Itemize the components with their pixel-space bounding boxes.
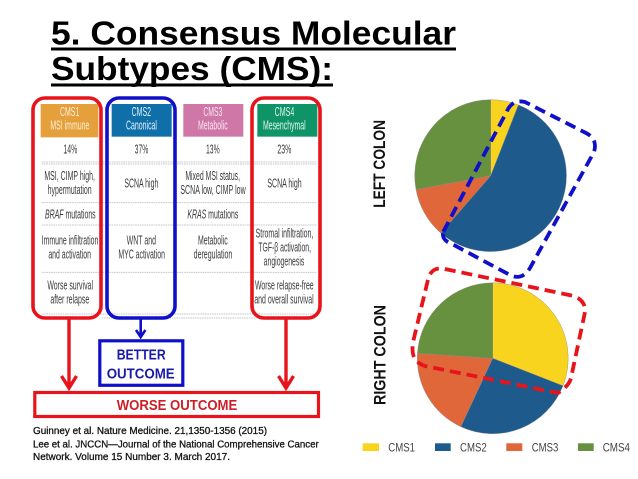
highlight box: CMS1 — [33, 98, 101, 318]
title: 5. Consensus Molecular — [51, 16, 456, 52]
references: Guinney et al. Nature Medicine. 21,1350-1356 (2015) — [33, 425, 267, 437]
genomic row: SCNA high — [267, 176, 302, 190]
pathway row — [42, 227, 313, 269]
header: CMS2 — [112, 104, 172, 137]
pathway row: TGF-β activation, — [258, 241, 311, 255]
survival row: Worse relapse-free — [255, 278, 314, 292]
header: CMS3: Metabolic — [198, 118, 228, 132]
genomic row: MSI, CIMP high, — [44, 169, 95, 183]
pathway row: Stromal infiltration, — [256, 227, 313, 241]
legend: CMS4 — [603, 443, 631, 455]
survival row: after relapse — [50, 292, 89, 306]
pie chart: left colon — [415, 100, 566, 252]
dashed outline: right colon CMS1 and CMS4 — [412, 268, 585, 393]
arrow: CMS2 to better outcome — [136, 319, 145, 337]
legend: CMS2 — [460, 443, 487, 455]
header: CMS3 — [183, 104, 243, 137]
pathway row: WNT and — [127, 234, 156, 248]
genomic row — [44, 169, 302, 197]
header: CMS1 — [41, 104, 98, 137]
label: right colon: RIGHT COLON — [372, 305, 390, 405]
arrow: CMS4 to worse outcome — [278, 319, 294, 388]
worse outcome box: WORSE OUTCOME — [117, 398, 238, 414]
highlight box: CMS2 — [107, 98, 175, 318]
header: CMS2: Canonical — [126, 118, 157, 132]
references: Network. Volume 15 Number 3. March 2017. — [33, 451, 230, 463]
percent row: 13% — [206, 142, 220, 156]
genomic row: hypermutation — [48, 183, 92, 197]
title — [51, 16, 456, 88]
percent row: 14% — [63, 142, 77, 156]
legend: CMS3 — [532, 443, 558, 455]
highlight box: CMS4 — [252, 98, 320, 318]
genomic row: SCNA high — [124, 176, 158, 190]
header: CMS3: CMS3 — [203, 105, 222, 119]
better outcome box: BETTER — [117, 347, 166, 363]
header: CMS4: Mesenchymal — [263, 118, 306, 132]
mutation row: KRAS mutations — [187, 208, 238, 222]
pathway row: and activation — [48, 248, 91, 262]
better outcome box: OUTCOME — [107, 366, 175, 382]
title: Subtypes (CMS): — [51, 51, 333, 88]
pathway row: angiogenesis — [264, 255, 304, 269]
legend: CMS1 — [388, 443, 415, 455]
pathway row: Metabolic — [198, 234, 228, 248]
genomic row: SCNA low, CIMP low — [180, 183, 246, 197]
better outcome box — [100, 341, 183, 385]
header: CMS4 — [257, 104, 317, 137]
percent row: 23% — [277, 142, 291, 156]
label: left colon: LEFT COLON — [371, 120, 389, 208]
mutation row — [45, 208, 238, 222]
worse outcome box — [35, 392, 319, 416]
survival row: Worse survival — [47, 278, 93, 292]
dashed outline: left colon CMS2 — [443, 101, 595, 277]
percent row: 37% — [135, 142, 148, 156]
pathway row: deregulation — [194, 248, 232, 262]
pathway row: MYC activation — [118, 248, 165, 262]
header: CMS1: CMS1 — [60, 105, 79, 119]
survival row — [47, 278, 314, 306]
legend — [363, 443, 631, 455]
references — [33, 425, 319, 463]
header: CMS2: CMS2 — [132, 105, 151, 119]
table: CMS subtypes — [41, 104, 317, 318]
arrow: CMS1 to worse outcome — [62, 319, 76, 388]
header: CMS1: MSI immune — [50, 118, 89, 132]
genomic row: Mixed MSI status, — [185, 169, 240, 183]
pie chart: right colon — [417, 283, 568, 434]
survival row: and overall survival — [254, 292, 314, 306]
pathway row: Immune infiltration — [42, 234, 98, 248]
references: Lee et al. JNCCN—Journal of the National Comprehensive Cancer — [33, 438, 319, 450]
mutation row: BRAF mutations — [45, 208, 96, 222]
percent row — [63, 142, 291, 156]
header: CMS4: CMS4 — [275, 105, 294, 119]
